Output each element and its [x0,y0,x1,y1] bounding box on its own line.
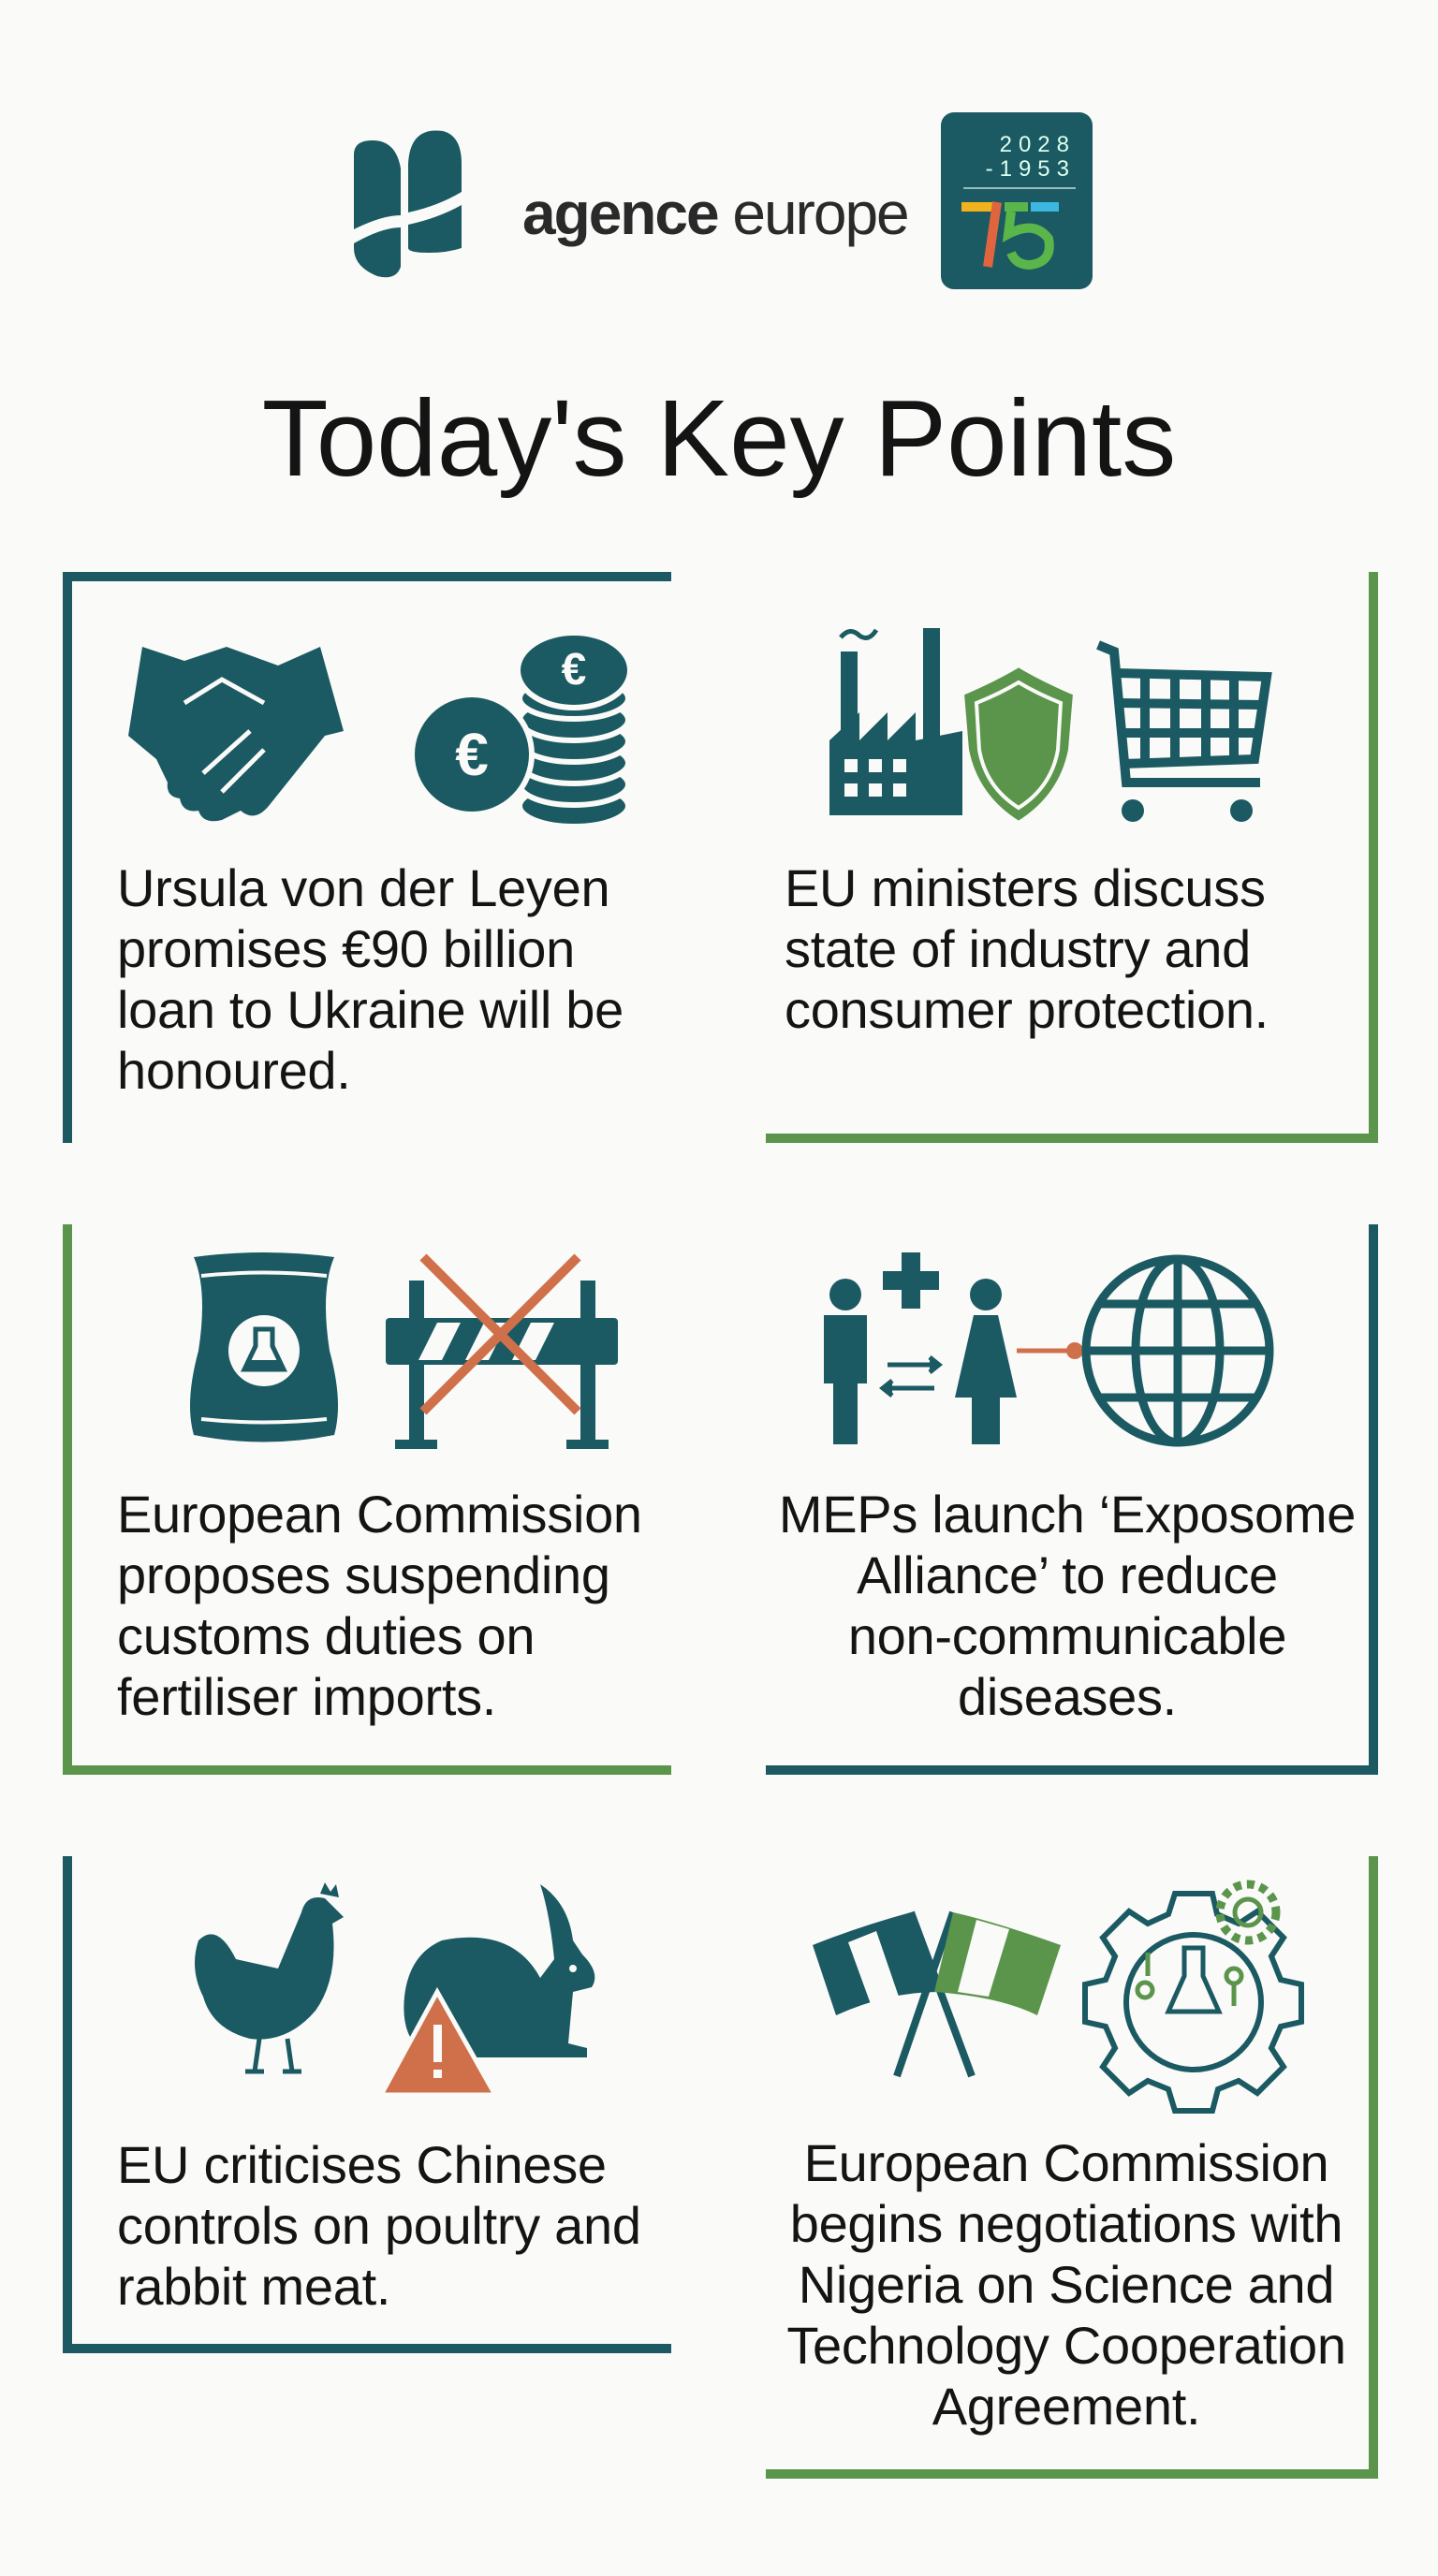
text: fertiliser: customs duties on [117,1606,535,1665]
text: Exposome: non-communicable [848,1606,1286,1665]
anniversary badge: -1953 [986,156,1076,182]
panel: Nigeria science cooperation [766,1856,1378,2479]
logo text: agence europe [522,180,908,247]
text: Nigeria: European Commission [804,2133,1328,2192]
panel: industry and consumer protection [766,572,1378,1143]
panel: Ukraine loan [63,572,671,1143]
panel: fertiliser duties [63,1224,671,1775]
text: poultry: controls on poultry and [117,2196,641,2255]
icon: factory shield cart [829,628,1272,822]
text: industry [785,858,1269,1039]
icon: handshake and euro coins: € [562,645,586,695]
logo [354,112,1093,289]
text: fertiliser [117,1485,642,1726]
text: fertiliser: fertiliser imports. [117,1667,496,1726]
text: Ukraine loan [117,858,624,1100]
icon: fertiliser bag and barrier [190,1252,618,1449]
text: Exposome: Alliance’ to reduce [857,1545,1278,1604]
text: fertiliser: proposes suspending [117,1545,610,1604]
text: Nigeria: Nigeria on Science and [799,2255,1334,2314]
text: Ukraine loan: Ursula von der Leyen [117,858,609,917]
text: fertiliser: European Commission [117,1485,642,1544]
text: industry: consumer protection. [785,980,1269,1039]
icon: people health and globe [824,1252,1273,1447]
text: poultry: rabbit meat. [117,2257,390,2316]
icon: crossed flags and science gear [813,1880,1304,2114]
anniversary badge: 2028 [1000,132,1076,157]
anniversary badge [941,112,1093,289]
text: poultry [117,2135,641,2316]
icon: handshake and euro coins [128,636,627,824]
title: Today's Key Points [262,377,1176,499]
text: Nigeria: begins negotiations with [790,2194,1343,2253]
text: Nigeria: Technology Cooperation [786,2316,1346,2375]
icon: handshake and euro coins: € [455,721,489,788]
text: Exposome: diseases. [958,1667,1177,1726]
panel: Exposome Alliance [766,1224,1378,1775]
logo icon [354,131,462,277]
text: Nigeria: Agreement. [932,2377,1200,2436]
text: Exposome: MEPs launch ‘Exposome [779,1485,1356,1544]
text: industry: state of industry and [785,919,1251,978]
text: Ukraine loan: honoured. [117,1041,351,1100]
text: Ukraine loan: loan to Ukraine will be [117,980,624,1039]
text: industry: EU ministers discuss [785,858,1266,917]
text: poultry: EU criticises Chinese [117,2135,607,2194]
text: Nigeria [786,2133,1346,2436]
panel: poultry and rabbit [63,1856,671,2353]
text: Ukraine loan: promises €90 billion [117,919,575,978]
icon: chicken rabbit warning [195,1882,595,2093]
text: Exposome [779,1485,1356,1726]
